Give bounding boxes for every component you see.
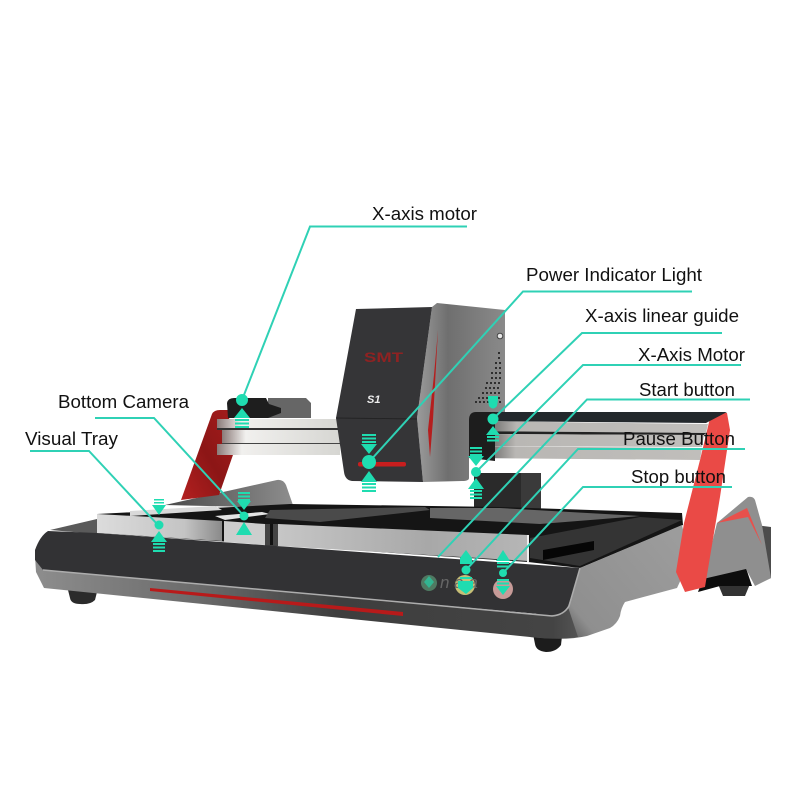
print head front face bbox=[336, 307, 432, 482]
callout: Pause Button bbox=[458, 429, 745, 594]
callout: Bottom Camera bbox=[58, 392, 252, 535]
control buttons bbox=[421, 575, 513, 599]
red base light bar bbox=[150, 588, 403, 616]
x-axis motor housing bbox=[227, 398, 311, 418]
tray top bbox=[97, 504, 683, 568]
callout: X-axis linear guide: X-axis linear guide bbox=[585, 306, 739, 326]
callout: Start button: Start button bbox=[639, 380, 735, 400]
callout: Bottom Camera: Bottom Camera bbox=[58, 392, 190, 412]
callout: Stop button: Stop button bbox=[631, 467, 726, 487]
S1 label: S1 bbox=[367, 394, 380, 406]
base side silver body bbox=[530, 525, 690, 639]
centre foot bbox=[533, 634, 562, 652]
stop button bbox=[493, 579, 513, 599]
side speaker dots bbox=[475, 353, 502, 402]
callout: Power Indicator Light bbox=[361, 265, 702, 492]
tray front silver panels bbox=[97, 514, 529, 562]
callout: X-Axis Motor: X-Axis Motor bbox=[638, 345, 745, 365]
base lower strip bbox=[35, 556, 578, 638]
callout: Visual Tray bbox=[25, 429, 167, 552]
base front strip highlight bbox=[43, 568, 580, 616]
base left shoulder bbox=[50, 519, 97, 534]
callout: X-Axis Motor bbox=[468, 345, 745, 499]
SMT logo: SMT bbox=[364, 349, 404, 365]
callout: Start button bbox=[424, 380, 750, 588]
power light bar bbox=[358, 462, 406, 466]
dark front face of base bbox=[35, 531, 580, 615]
print head silver side bbox=[417, 303, 505, 482]
central dark block behind head bbox=[474, 473, 541, 509]
callout: X-axis motor: X-axis motor bbox=[372, 204, 477, 224]
side indicator ring bbox=[497, 333, 503, 339]
pause button bbox=[455, 575, 475, 595]
callout: X-axis linear guide bbox=[486, 306, 739, 442]
right rear wing bbox=[698, 497, 771, 596]
start button bbox=[421, 575, 437, 591]
callout: Power Indicator Light: Power Indicator Light bbox=[526, 265, 702, 285]
left foot bbox=[68, 590, 97, 604]
callout: Pause Button: Pause Button bbox=[623, 429, 735, 449]
callout: Stop button bbox=[496, 467, 732, 595]
head lower line bbox=[336, 418, 417, 419]
right linear rail bbox=[469, 412, 727, 461]
callout: X-axis motor bbox=[234, 204, 477, 428]
left red arm bbox=[181, 410, 234, 500]
machine illustration bbox=[35, 303, 771, 652]
left linear rail bbox=[217, 419, 340, 455]
faint watermark: n a a bbox=[440, 573, 478, 592]
callout: Visual Tray: Visual Tray bbox=[25, 429, 118, 449]
right red arm bbox=[676, 413, 730, 592]
left rear wing bbox=[165, 480, 294, 508]
side red accent bbox=[428, 330, 438, 457]
